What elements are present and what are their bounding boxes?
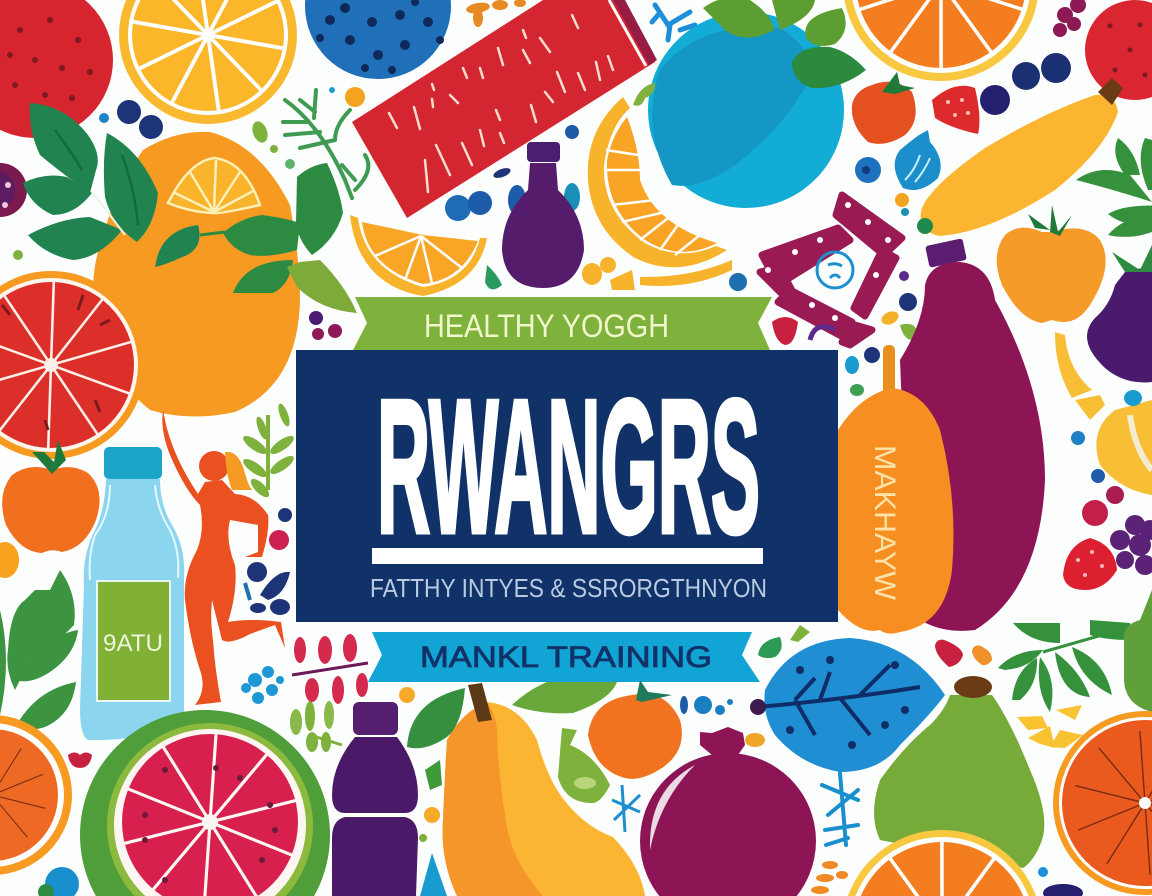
small blue dots centre (680, 696, 765, 747)
orange sprig top (465, 0, 526, 27)
small dots near herb (13, 87, 365, 260)
apple left (2, 440, 100, 553)
berries left of navy (245, 508, 292, 615)
purple bottle top (502, 142, 584, 288)
leaves right top (1076, 138, 1152, 237)
subtitle: FATTHY INTYES & SSRORGTHNYON (370, 573, 767, 603)
water bottle (80, 447, 184, 740)
woman silhouette (162, 410, 285, 705)
bottom-left small blue fruit (38, 867, 79, 896)
blueberries top right (980, 53, 1071, 115)
blue sprig centre (612, 785, 640, 832)
strawberry right (1063, 538, 1117, 590)
orange half slice (350, 215, 487, 296)
big orange (93, 132, 300, 417)
orange wedge crescent (588, 97, 732, 286)
red bar (352, 0, 657, 218)
fruit: teal ball (648, 12, 844, 208)
fruit: red top-right (1085, 0, 1152, 100)
purple bottle bottom (332, 702, 418, 896)
blue fruit with branch (750, 638, 945, 772)
grapes by ribbon (309, 311, 342, 340)
orange pear with text (838, 345, 954, 634)
purple fruit right (1087, 245, 1152, 382)
yellow pear (443, 683, 645, 896)
green ribbon (353, 297, 772, 350)
small yellow chunks (582, 257, 635, 290)
leaf by bottle (407, 688, 465, 748)
fruit: orange slice top right (831, 0, 1051, 90)
ribbon heading: HEALTHY YOGGH (424, 308, 669, 344)
apple small red-orange (852, 72, 916, 144)
leaves lower left (0, 570, 78, 730)
blueberries by lemon (99, 100, 163, 139)
cherries near ribbon (772, 271, 918, 396)
title underline (372, 548, 763, 564)
grapes right (1110, 515, 1152, 575)
orange citrus lower right (1053, 711, 1152, 895)
navy berry bottom (1038, 867, 1083, 896)
leaves left (23, 103, 158, 260)
herb sprig (283, 90, 368, 198)
small apple (588, 680, 682, 779)
bottle label text: 9ATU (103, 630, 163, 657)
lemon half on orange (168, 158, 260, 213)
small blue fruit (895, 130, 941, 190)
orange apple right (997, 205, 1106, 323)
grapefruit pink with green rim (80, 709, 330, 896)
maroon figure (760, 195, 902, 345)
maroon pear (900, 238, 1045, 631)
branch with leaves (155, 163, 357, 313)
fruit: purple far left (0, 163, 27, 217)
grapefruit left (0, 260, 158, 470)
leaves lower right (998, 590, 1152, 712)
orange sprig bottom (811, 861, 848, 894)
blue ribbon (368, 632, 760, 682)
grape cluster top (1053, 0, 1086, 37)
blueberries centre (445, 125, 580, 289)
banana (917, 78, 1123, 236)
small yellow left edge (0, 542, 19, 578)
small dots right (1071, 390, 1142, 526)
pear label text: MAKHAYW (868, 445, 901, 601)
small sprigs bottom (290, 687, 447, 896)
strawberry top (932, 86, 979, 134)
fruit: blue berry top (305, 0, 451, 79)
fruit: lemon slice top (118, 0, 298, 124)
pomegranate (640, 727, 816, 896)
ribbon training text: MANKL TRAINING (420, 641, 712, 674)
red berry branch (292, 634, 368, 704)
orange citrus bottom (830, 821, 1054, 896)
yellow banana and segments (1055, 332, 1152, 495)
blue coral (241, 666, 284, 704)
citrus lower left (0, 715, 72, 875)
small dots centre-right (633, 83, 747, 291)
green pear (874, 676, 1044, 868)
small hearts lower right (758, 625, 992, 667)
small green pear (558, 728, 610, 803)
blue sprig bottom (822, 773, 858, 845)
green sprig left (241, 402, 296, 500)
yellow slice bits (1017, 705, 1083, 748)
small berries (855, 157, 909, 216)
fruit: red top-left (0, 0, 113, 138)
navy title panel (296, 350, 838, 622)
blue sprig top (652, 5, 695, 40)
red heart near citrus (68, 752, 92, 768)
leaf over pear (512, 682, 617, 713)
leaves on teal ball (703, 0, 866, 88)
